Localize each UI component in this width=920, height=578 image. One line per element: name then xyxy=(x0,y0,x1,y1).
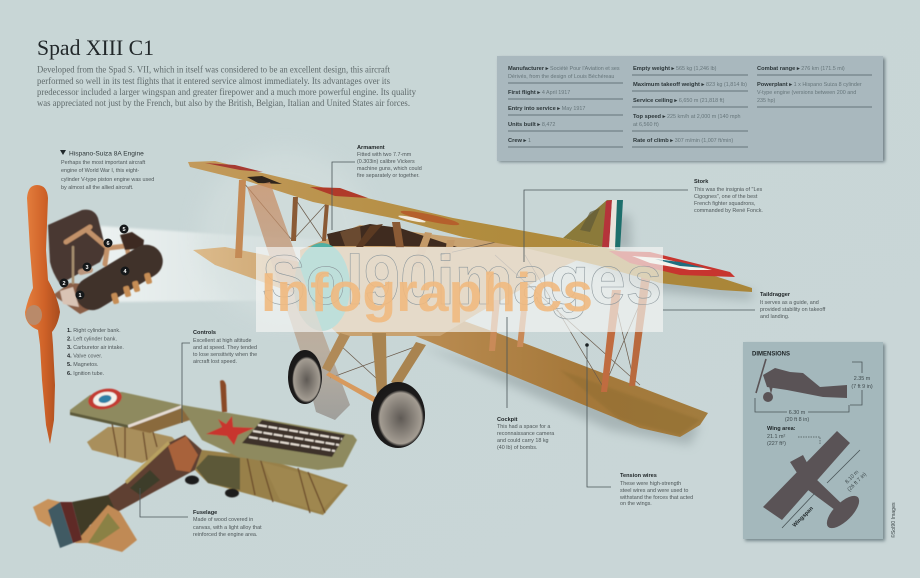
landing gear xyxy=(288,333,426,448)
upper wing xyxy=(188,161,752,292)
height dimension: 2.35 m xyxy=(854,376,871,382)
length dimension: (20 ft 8 in) xyxy=(785,417,809,423)
engine part numbers xyxy=(60,224,130,300)
column 1 specs: Dérivés, from the design of Louis Béchéreau xyxy=(508,74,614,80)
height dimension: (7 ft 9 in) xyxy=(851,384,873,390)
red star xyxy=(206,416,254,445)
callout: stork xyxy=(524,179,763,262)
callout: stork: Cigognes", one of the best xyxy=(694,194,758,200)
title: Spad XIII C1 xyxy=(37,35,154,60)
callout: armament: machine guns, which could xyxy=(357,166,422,172)
top view silhouette xyxy=(763,431,864,533)
lower wing xyxy=(193,247,708,437)
height dimension xyxy=(850,362,873,405)
callout: tension wires xyxy=(585,343,693,507)
pitot mast xyxy=(220,380,227,412)
callout: taildragger: provided stability on takeoff xyxy=(760,307,826,313)
tailplane xyxy=(75,505,137,552)
callout: fuselage: reinforced the engine area. xyxy=(193,532,257,538)
engine parts list: 2. Left cylinder bank. xyxy=(67,336,117,342)
engine heading and description: Perhaps the most important aircraft xyxy=(61,160,146,166)
callout: armament: fire separately or together. xyxy=(357,173,420,179)
engine parts list: 6. Ignition tube. xyxy=(67,371,104,377)
callout: cockpit: This had a space for a xyxy=(497,424,550,430)
column 2 specs xyxy=(632,66,748,147)
engine parts list: 3. Carburetor air intake. xyxy=(67,345,124,351)
callout: fuselage: Made of wood covered in xyxy=(193,517,253,523)
interplane struts and wires xyxy=(235,180,651,400)
left cylinder bank xyxy=(48,210,106,284)
cutaway aircraft illustration xyxy=(33,380,357,552)
engine parts list: 5. Magnetos. xyxy=(67,362,98,368)
column 1 specs: Crew ▸ 1 xyxy=(508,138,531,144)
wing area: Wing area: xyxy=(767,426,796,432)
callout: controls: to lose sensitivity when the xyxy=(193,352,257,358)
crankcase xyxy=(53,283,112,314)
engine parts list: 4. Valve cover. xyxy=(67,354,102,360)
engine parts list xyxy=(67,328,124,377)
column 3 specs: 235 hp) xyxy=(757,98,775,104)
heading: DIMENSIONS xyxy=(752,352,790,358)
callout: cockpit: (40 lb) of bombs. xyxy=(497,445,537,451)
wing rib grid xyxy=(242,420,345,457)
blurred propeller xyxy=(247,182,350,420)
wingspan dimension xyxy=(782,450,868,529)
callout: cockpit: reconnaissance camera xyxy=(497,431,554,437)
tail rear fuselage xyxy=(72,495,116,540)
lower wing cutaway xyxy=(87,427,180,463)
length dimension xyxy=(755,398,849,423)
cowling xyxy=(294,243,350,331)
callout: armament: (0.303in) calibre Vickers xyxy=(357,159,415,165)
intro text block: performed so well in its test flights that it entered service almost immediately. Its advantages over its xyxy=(37,76,390,87)
panel: specifications xyxy=(497,56,885,162)
column 2 specs: Rate of climb ▸ 307 m/min (1,007 ft/min) xyxy=(633,138,733,144)
callout: cockpit: and could carry 18 kg xyxy=(497,438,549,444)
callout: taildragger: and landing. xyxy=(760,314,789,320)
wingspan dimension: Wingspan xyxy=(792,505,815,529)
callout: tension wires: steel wires and were used to xyxy=(620,488,688,494)
tail fin cutaway xyxy=(33,499,60,527)
wingspan dimension: 8.10 m xyxy=(844,469,861,485)
column 1 specs xyxy=(508,66,623,147)
callout: controls xyxy=(182,330,257,423)
callout: fuselage: canvas, with a light alloy that xyxy=(193,525,262,531)
callout: armament xyxy=(332,145,422,230)
column 1 specs: Units built ▸ 8,472 xyxy=(508,122,555,128)
callout: taildragger: It serves as a guide, and xyxy=(760,300,819,306)
callout: tension wires: Tension wires xyxy=(620,473,657,479)
watermark band: Sol90images xyxy=(262,241,662,319)
callout: tension wires: These were high-strength xyxy=(620,481,681,487)
exhaust stubs xyxy=(111,272,152,305)
engine part numbers: 4 xyxy=(123,269,127,275)
wing area xyxy=(767,426,820,447)
column 3 specs: Combat range ▸ 276 km (171.5 mi) xyxy=(757,66,845,72)
wing roundel xyxy=(609,251,735,277)
valve cover xyxy=(70,239,169,316)
wing area: (227 ft²) xyxy=(767,441,786,447)
wingspan dimension: (26 ft 7 in) xyxy=(847,471,868,493)
callout: tension wires: withstand the forces that acted xyxy=(619,495,693,501)
credit: ©Sol90 Images xyxy=(890,502,897,538)
callout: armament: Armament xyxy=(357,145,385,151)
callout: fuselage xyxy=(140,488,262,538)
callout: stork: This was the insignia of "Les xyxy=(694,187,762,193)
light beam from engine xyxy=(100,226,330,302)
engine heading and description: cylinder V-type piston engine was used xyxy=(61,177,154,183)
column 1 specs: Entry into service ▸ May 1917 xyxy=(508,106,585,112)
intro text block: Developed from the Spad S. VII, which in itself was considered to be an excellent design, this aircraft xyxy=(37,64,390,76)
column 3 specs: V-type engine (versions between 200 and xyxy=(757,90,856,96)
engine heading and description xyxy=(60,150,154,191)
icon: propeller xyxy=(25,185,60,444)
roundel xyxy=(86,386,124,412)
aircraft shadow xyxy=(420,215,755,445)
callout: taildragger xyxy=(663,292,826,320)
main aircraft illustration xyxy=(188,161,755,448)
side view silhouette xyxy=(756,359,847,402)
landing wheels xyxy=(185,476,199,484)
engine part numbers: 2 xyxy=(62,281,66,287)
propeller disc glow xyxy=(200,150,370,320)
watermark band: Infographics xyxy=(261,261,593,323)
icon: cutaway engine xyxy=(48,210,169,316)
callout: controls: aircraft lost speed. xyxy=(193,359,237,365)
column 1 specs: First flight ▸ 4 April 1917 xyxy=(508,90,570,96)
callout: stork: French fighter squadrons, xyxy=(694,201,756,207)
tail fin xyxy=(563,200,623,250)
engine part numbers: 5 xyxy=(122,227,126,233)
callout: armament: Fitted with two 7.7-mm xyxy=(357,152,412,158)
callout: stork: Stork xyxy=(694,179,709,185)
engine part numbers: 6 xyxy=(106,241,110,247)
callout: controls: and at speed. They tended xyxy=(193,345,257,351)
engine heading and description: by almost all the allied aircraft. xyxy=(61,185,134,191)
engine heading and description: engine of World War I, this eight- xyxy=(61,168,139,174)
intro text block xyxy=(37,64,416,109)
upper wing cutaway xyxy=(70,392,357,470)
intro text block: was appreciated not just by the French, but also by the British, Belgian, Italian and United States air forces. xyxy=(37,98,410,109)
column 2 specs: Service ceiling ▸ 6,650 m (21,818 ft) xyxy=(633,98,725,104)
callout: stork: commanded by René Fonck. xyxy=(694,208,763,214)
callout: cockpit: Cockpit xyxy=(497,417,518,423)
callout: controls: Excellent at high altitude xyxy=(193,338,251,344)
callout: taildragger: Taildragger xyxy=(760,292,791,298)
column 2 specs: Top speed ▸ 225 km/h at 2,000 m (140 mph xyxy=(633,114,740,120)
wing area: 21.1 m² xyxy=(767,434,785,440)
column 3 specs xyxy=(757,66,872,107)
engine parts list: 1. Right cylinder bank. xyxy=(67,328,121,334)
callout: tension wires: on the wings. xyxy=(620,501,652,507)
column 2 specs: Empty weight ▸ 565 kg (1,246 lb) xyxy=(633,66,717,72)
callout: cockpit xyxy=(497,317,554,451)
pipes xyxy=(66,227,128,283)
engine heading and description: Hispano-Suiza 8A Engine xyxy=(69,150,144,158)
length dimension: 6.30 m xyxy=(789,410,806,416)
engine part numbers: 1 xyxy=(78,293,82,299)
engine part numbers: 3 xyxy=(85,265,89,271)
panel: dimensions xyxy=(743,342,885,541)
column 3 specs: Powerplant ▸ 1 x Hispano Suiza 8 cylinder xyxy=(757,82,862,88)
fuselage xyxy=(300,225,600,336)
intro text block: predecessor included a larger wingspan and greater firepower and a much more powerful engine. Its quality xyxy=(37,87,416,98)
callout: controls: Controls xyxy=(193,330,216,336)
column 2 specs: Maximum takeoff weight ▸ 823 kg (1,814 lb) xyxy=(633,82,747,88)
column 1 specs: Manufacturer ▸ Société Pour l'Aviation et ses xyxy=(508,66,620,72)
column 2 specs: at 6,560 ft) xyxy=(633,122,659,128)
callout: fuselage: Fuselage xyxy=(193,510,217,516)
fuselage cutaway xyxy=(105,435,202,515)
